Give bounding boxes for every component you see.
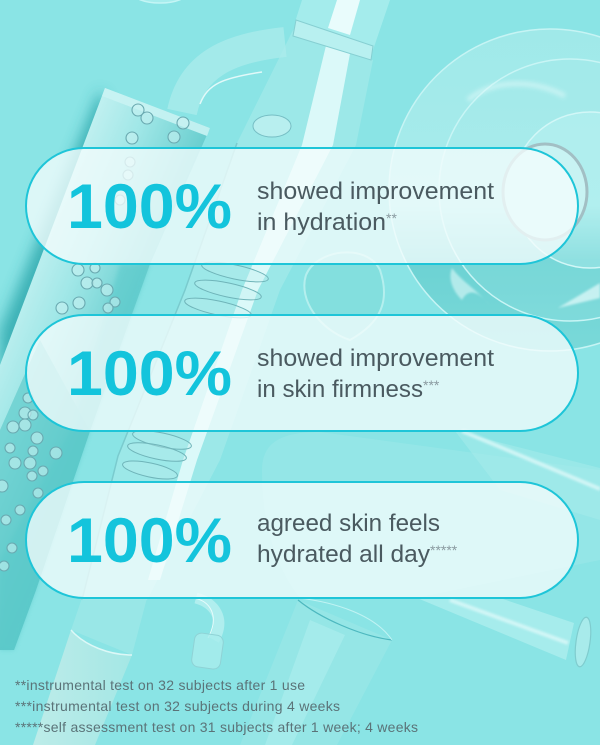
description: hydrated all day: [257, 541, 431, 568]
footnotes: [15, 677, 418, 735]
liquid droplet: [304, 252, 384, 340]
bubbles in block: [0, 104, 189, 571]
left dark shadow: [0, 90, 110, 385]
coil rings: [121, 258, 270, 483]
diagonal test tube right: [262, 431, 600, 668]
bottle bulb detail: [253, 115, 291, 137]
description: showed improvement: [257, 178, 494, 205]
footnotes: *****self assessment test on 31 subjects after 1 week; 4 weeks: [15, 719, 418, 735]
description: [257, 345, 494, 403]
pill background: [26, 315, 578, 431]
panel: stat skin firmness: [26, 315, 578, 431]
description: [257, 178, 494, 236]
white rod: [148, 0, 360, 580]
description: showed improvement: [257, 345, 494, 372]
frosted tube bottom: [33, 598, 147, 745]
small curved nozzle: [191, 598, 224, 670]
top dish edge: [132, 0, 188, 3]
glass block: [0, 88, 210, 650]
long central tube: [82, 0, 373, 600]
pill background: [26, 148, 578, 264]
footnotes: ***instrumental test on 32 subjects during 4 weeks: [15, 698, 340, 714]
description: ***: [423, 377, 440, 393]
footnotes: **instrumental test on 32 subjects after 1 use: [15, 677, 305, 693]
curved side arm: [182, 42, 285, 112]
panel: stat hydrated all day: [26, 482, 578, 598]
description: agreed skin feels: [257, 510, 440, 537]
beaker lower centre: [240, 598, 392, 745]
description: *****: [430, 542, 458, 558]
description: **: [386, 210, 397, 226]
pill background: [26, 482, 578, 598]
large glass dish: [389, 29, 600, 351]
top neck of bottle: [293, 0, 390, 60]
description: [257, 510, 458, 568]
panel: stat hydration: [26, 148, 578, 264]
description: in skin firmness: [257, 376, 423, 403]
big number: 100%: [67, 172, 232, 242]
description: in hydration: [257, 209, 386, 236]
big number: 100%: [67, 506, 232, 576]
big number: 100%: [67, 339, 232, 409]
